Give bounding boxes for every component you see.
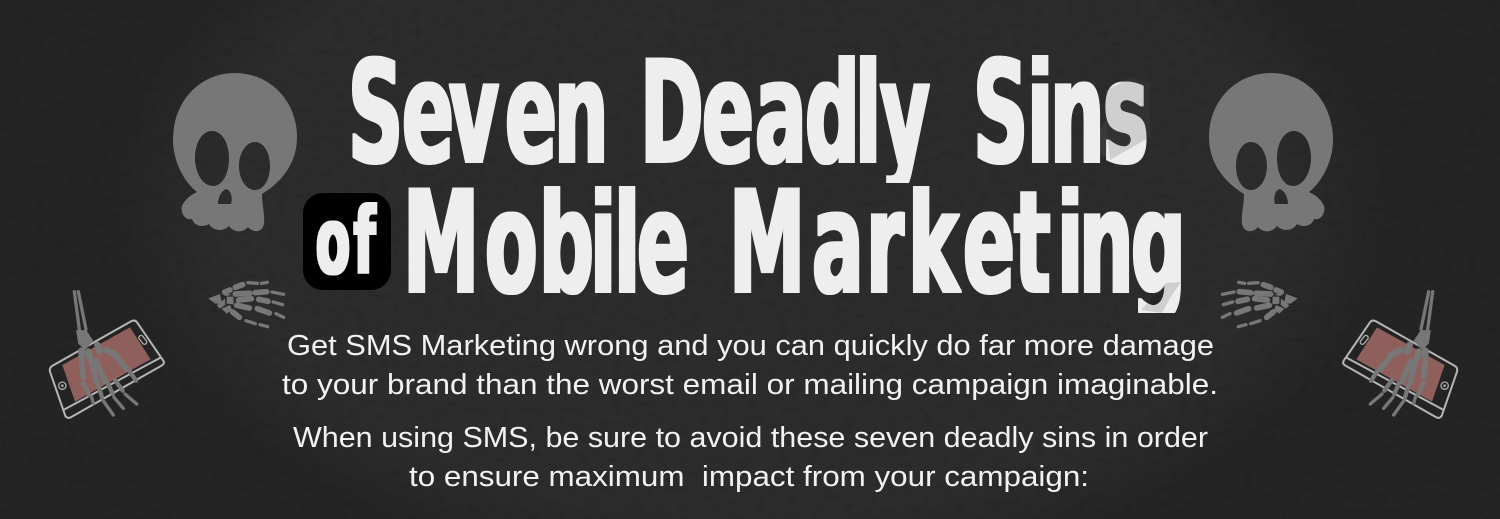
badge: of [303,188,391,295]
right skeleton hand [1222,282,1298,327]
left skeleton hand [208,282,284,327]
left skull [173,73,297,231]
intro paragraph: Get SMS Marketing wrong and you can quickly do far more damage [287,330,1214,362]
call to action paragraph: to ensure maximum impact from your campaign: [409,461,1089,493]
badge: of: of [316,188,376,295]
left phone held by skeleton hand [50,292,164,418]
intro paragraph [282,330,1218,401]
call to action paragraph [293,422,1208,493]
intro paragraph: to your brand than the worst email or mailing campaign imaginable. [282,369,1218,401]
ghost shading over title letters [1106,78,1181,313]
right skull [1209,73,1333,231]
call to action paragraph: When using SMS, be sure to avoid these seven deadly sins in order [293,422,1208,454]
right phone held by skeleton hand [1343,292,1457,418]
title line two: Mobile Marketing [403,160,1186,326]
title line one: Seven Deadly Sins [348,30,1149,196]
ghost shape behind title [1089,78,1150,160]
